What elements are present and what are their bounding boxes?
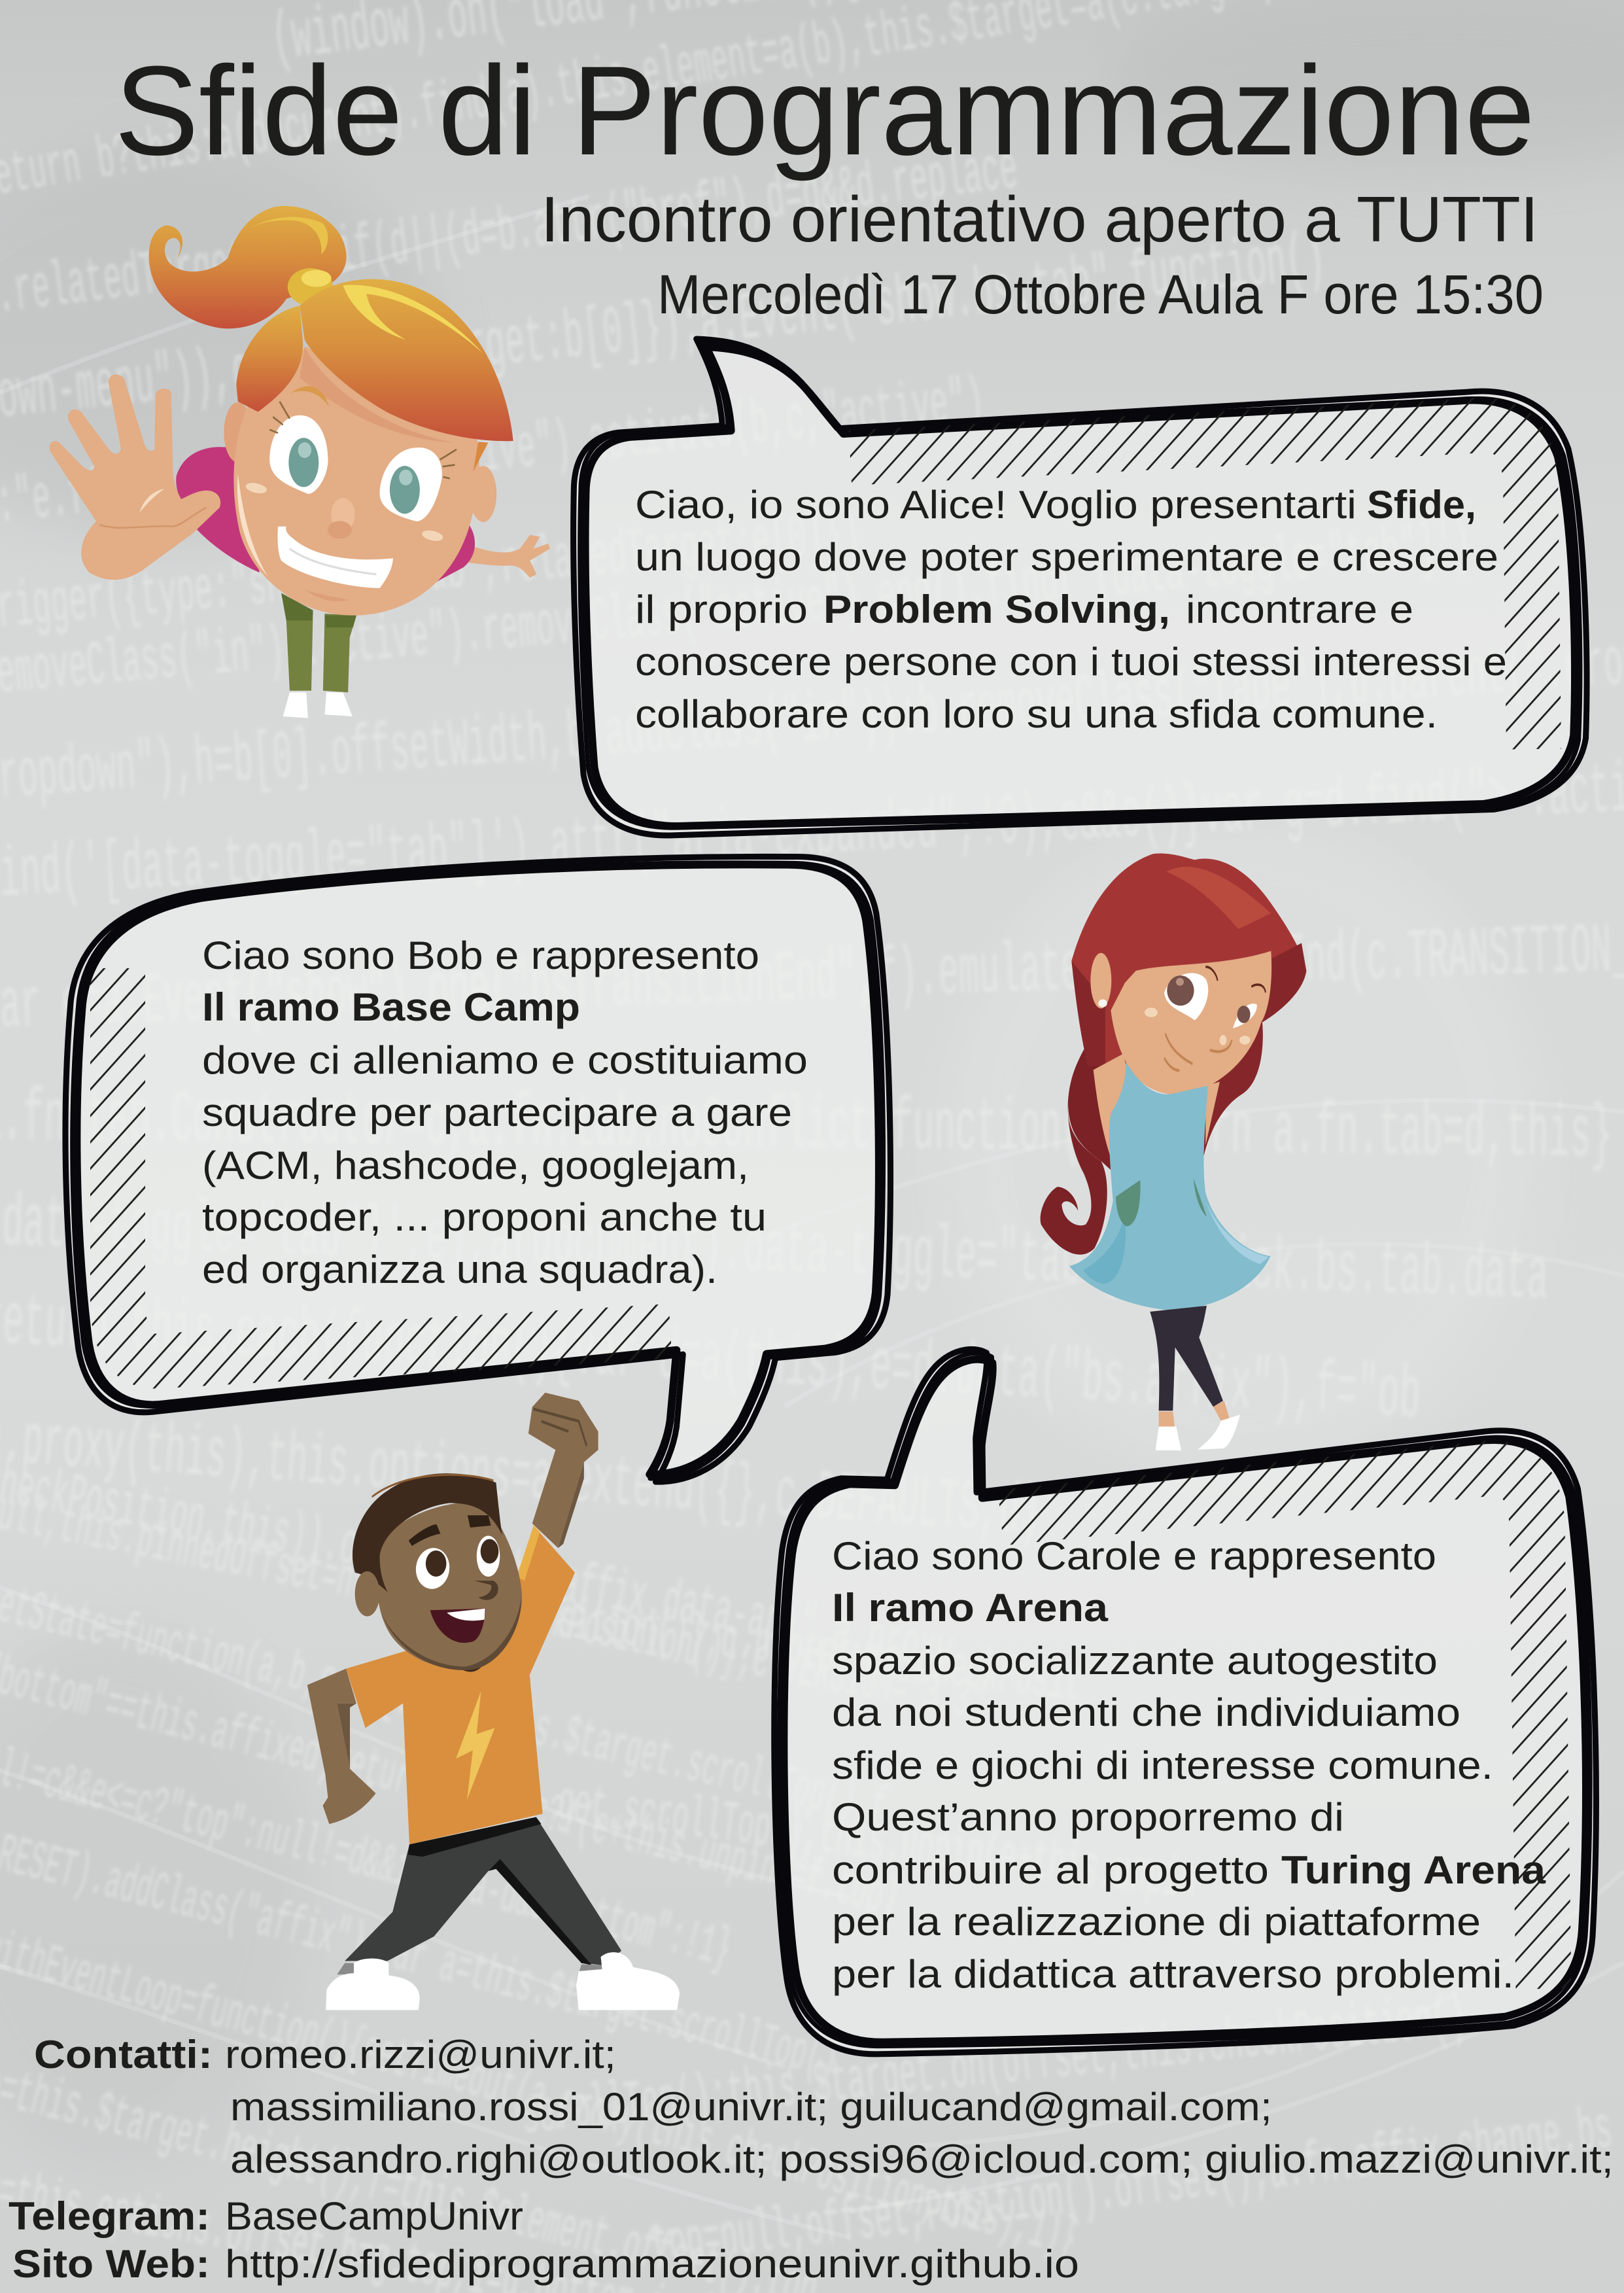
contacts: Contatti:: [34, 2033, 213, 2076]
text: introduction: Problem Solving,: [823, 587, 1170, 631]
background: blurred code texture: a.proxy(this),this.options=a.extend({},c.DEFAULTS,d): [0, 1400, 1043, 1554]
text: Arena: Turing Arena: [1281, 1848, 1546, 1892]
text: Arena: Ciao sono Carole e rappresento: [832, 1534, 1436, 1578]
text: Arena: contribuire al progetto: [832, 1848, 1269, 1892]
background: blurred code texture: "bottom"==this.affixed)return null!=c?!(e+this.unpin<=f.top): [0, 1643, 905, 1932]
text: Arena: [832, 1534, 1546, 1996]
text: Arena: spazio socializzante autogestito: [832, 1639, 1438, 1683]
background: blurred code texture: top=null;offset,Position().offset();a.fn.affix.change.bs: [648, 2096, 1616, 2282]
background: blurred code texture: a.fn.tab.Constructor=c,a.fn.tab.noConflict=function(){return a.fn.tab=d,this}: [0, 1077, 1613, 1178]
background: blurred code texture: get.scrollTop(),this.unpin(e+this.unpin: [554, 1770, 1200, 1914]
text: Base Camp: squadre per partecipare a gare: [202, 1091, 792, 1134]
telegram: Telegram:: [9, 2194, 210, 2238]
text: introduction: Ciao, io sono Alice! Voglio presentarti: [635, 483, 1356, 527]
title: Sfide di Programmazione: [114, 40, 1535, 182]
text: Base Camp: dove ci alleniamo e costituiamo: [202, 1038, 808, 1082]
text: Arena: per la didattica attraverso problemi.: [832, 1952, 1514, 1996]
text: introduction: incontrare e: [1186, 587, 1413, 631]
background: blurred code texture: return this.each(function(){var d=a(this),e=d.data("bs.affix"),f="ob: [0, 1280, 1423, 1439]
text: Base Camp: (ACM, hashcode, googlejam,: [202, 1144, 749, 1187]
background: blurred code texture: [data-toggle="tab"]',e),a(document).data-toggle="tab"]',"click.bs.tab.data: [0, 1182, 1549, 1320]
text: introduction: Sfide,: [1367, 483, 1476, 527]
contacts: romeo.rizzi@univr.it;: [225, 2033, 616, 2076]
background: blurred code texture: scrollTop();this.$target.on(offset,this.checkPosition(): [518, 1984, 1470, 2151]
speech bubble: Carole: [773, 1347, 1597, 2054]
text: introduction: [635, 483, 1507, 736]
subtitle: Incontro orientativo aperto a TUTTI: [541, 183, 1538, 255]
telegram: BaseCampUnivr: [225, 2194, 523, 2238]
text: Base Camp: Ciao sono Bob e rappresento: [202, 934, 759, 977]
character: Carole: [1041, 854, 1306, 1450]
text: introduction: collaborare con loro su una sfida comune.: [635, 692, 1438, 736]
text: introduction: conoscere persone con i tuoi stessi interessi e: [635, 640, 1507, 684]
telegram: [9, 2194, 523, 2238]
text: Arena: per la realizzazione di piattaforme: [832, 1900, 1481, 1944]
speech bubble: Bob: [65, 856, 891, 1484]
hatching: [118, 968, 670, 1361]
text: Arena: sfide e giochi di interesse comune.: [832, 1743, 1493, 1787]
character: Bob: [307, 1393, 680, 2010]
background: blurred code texture: .RESET).addClass("affix");var a=this.$target.scrollTop(): [0, 1820, 844, 2093]
text: Base Camp: [202, 934, 808, 1291]
speech bubble: Alice: [573, 336, 1587, 835]
date and place: Mercoledì 17 Ottobre Aula F ore 15:30: [657, 264, 1544, 325]
contacts: massimiliano.rossi_01@univr.it; guilucand@gmail.com;: [230, 2085, 1272, 2129]
hatching: [850, 425, 1534, 749]
background: blurred code texture: e.relatedTarget),"):if(d||(d=b.attr("href"),d=d&&d.replace: [0, 134, 1022, 333]
website: Sito Web:: [12, 2242, 210, 2286]
background: blurred code texture: null,this.pinnedOffset=null,this.checkPosition()};c.VERSION="3.3": [0, 1479, 990, 1736]
text: Base Camp: ed organizza una squadra).: [202, 1248, 717, 1291]
text: Arena: Quest’anno proporremo di: [832, 1795, 1344, 1839]
background: blurred code texture: withEventLoop=function(){setTimeout(a.proxy(this.checkPosition,this),1)}: [0, 1918, 1084, 2271]
contacts: alessandro.righi@outlook.it; possi96@icloud.com; giulio.mazzi@univr.it;: [230, 2137, 1614, 2181]
text: Arena: Il ramo Arena: [832, 1586, 1109, 1630]
text: Base Camp: topcoder, ... proponi anche tu: [202, 1195, 767, 1239]
background: blurred code texture: checkPosition,this)).on("click.bs.affix.data-api",a.proxy: [0, 1449, 958, 1687]
hatching: [1001, 1468, 1544, 1989]
background: blurred code texture: getState=function(a,b,c,d){var e=this.$target.scrollTop(),f: [0, 1571, 893, 1840]
background: blurred code texture: trigger({type:"shown.bs.tab",relatedTarget:e[0]}): [0, 499, 863, 647]
contacts: [34, 2033, 1614, 2181]
background: blurred code texture: removeClass("in"),.active").removeClass("active").end().find('[data-toggle="tab"]'): [0, 510, 1475, 712]
text: introduction: un luogo dove poter sperimentare e crescere: [635, 535, 1498, 579]
text: Arena: da noi studenti che individuiamo: [832, 1690, 1460, 1734]
background: blurred code texture: down-menu")),g=a.Event(Target:b[0]});a.Event("show.bs.tab",function(): [0, 220, 1329, 440]
character: Alice: [49, 206, 550, 718]
background: blurred code texture: ":"e.find(".private(b,c,"active").activate(b,c,"active"): [0, 365, 988, 542]
background: blurred code texture: sition()};c.prototype.checkPosit: [554, 1587, 1085, 1717]
text: introduction: il proprio: [635, 587, 808, 631]
website: http://sfidediprogrammazioneunivr.github.io: [225, 2242, 1079, 2286]
text: Base Camp: Il ramo Base Camp: [202, 985, 580, 1029]
